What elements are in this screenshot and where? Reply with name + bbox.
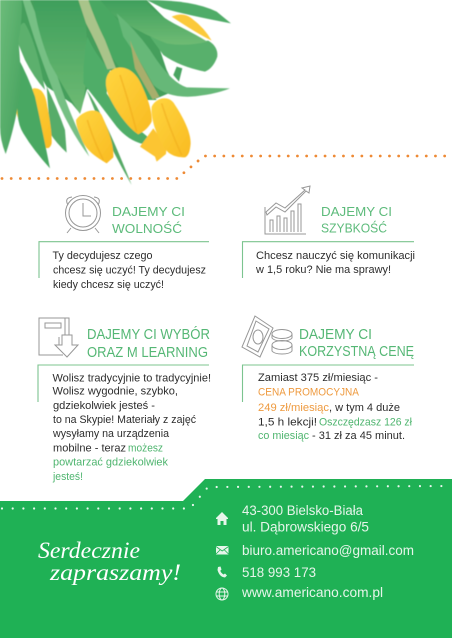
heading: szybkość bbox=[321, 204, 392, 236]
heading: cena: DAJEMY CI bbox=[299, 326, 372, 343]
greeting: zapraszamy! bbox=[49, 560, 181, 585]
text: wybór: wysyłamy na urządzenia bbox=[52, 428, 169, 440]
text: wybór: to na Skypie! Materiały z zajęć bbox=[53, 414, 197, 426]
text: cena bbox=[258, 372, 413, 442]
greeting bbox=[38, 538, 181, 585]
text: wolność: Ty decydujesz czego bbox=[52, 250, 153, 262]
rule: wolność bbox=[39, 242, 209, 278]
heading: wybór bbox=[87, 326, 210, 361]
icon: phone bbox=[218, 566, 227, 578]
white dotted divider bbox=[2, 486, 452, 508]
text: wybór bbox=[52, 372, 211, 483]
text: cena: 1,5 h lekcji! bbox=[258, 417, 317, 429]
text: wolność: chcesz się uczyć! Ty decydujesz bbox=[53, 264, 206, 276]
website: www.americano.com.pl bbox=[241, 585, 383, 600]
heading: wybór: ORAZ M LEARNING bbox=[87, 344, 208, 361]
text: wybór: możesz bbox=[128, 443, 163, 455]
text: wolność: kiedy chcesz się uczyć! bbox=[53, 279, 164, 291]
email: biuro.americano@gmail.com bbox=[242, 543, 414, 558]
text: cena: - 31 zł za 45 minut. bbox=[312, 430, 405, 442]
icon: envelope bbox=[216, 546, 228, 554]
panel: szybkość bbox=[242, 186, 415, 278]
heading: wybór: DAJEMY CI WYBÓR bbox=[87, 326, 210, 343]
panel: wybór bbox=[38, 318, 211, 483]
text: wybór: gdziekolwiek jesteś - bbox=[53, 400, 155, 412]
icon: rising chart bbox=[265, 186, 310, 234]
icon: document download bbox=[39, 318, 78, 357]
heading: wolność bbox=[112, 204, 185, 236]
heading: cena: KORZYSTNĄ CENĘ bbox=[299, 343, 414, 360]
greeting: Serdecznie bbox=[38, 538, 140, 563]
rule: szybkość bbox=[242, 242, 414, 278]
icon: banknote and coins bbox=[242, 316, 292, 357]
panel: wolność bbox=[39, 196, 209, 291]
text: wybór: Wolisz wygodnie, szybko, bbox=[52, 386, 178, 398]
footer band bbox=[0, 479, 452, 638]
orange dotted divider bbox=[2, 156, 452, 178]
icon: alarm clock bbox=[66, 196, 100, 233]
photo: yellow tulips bbox=[0, 0, 231, 185]
text: wybór: powtarzać gdziekolwiek bbox=[53, 457, 169, 469]
text: cena: 249 zł/miesiąc bbox=[258, 402, 330, 414]
phone: 518 993 173 bbox=[242, 565, 316, 580]
heading: wolność: DAJEMY CI bbox=[112, 204, 185, 219]
panel: cena bbox=[242, 316, 414, 442]
text: wolność bbox=[52, 250, 206, 291]
text: cena: , w tym 4 duże bbox=[329, 402, 400, 414]
address: ul. Dąbrowskiego 6/5 bbox=[242, 520, 369, 535]
icon: home bbox=[216, 512, 228, 525]
heading: wolność: WOLNOŚĆ bbox=[112, 221, 182, 236]
heading: szybkość: DAJEMY CI bbox=[321, 204, 392, 219]
text: szybkość: Chcesz nauczyć się komunikacji bbox=[256, 250, 415, 262]
icon: globe bbox=[216, 588, 228, 600]
text: wybór: mobilne - teraz bbox=[53, 443, 126, 455]
text: cena: co miesiąc bbox=[258, 430, 310, 442]
rule: wybór bbox=[38, 365, 209, 402]
text: szybkość bbox=[255, 250, 415, 276]
address: 43-300 Bielsko-Biała bbox=[242, 503, 363, 518]
heading: cena bbox=[299, 326, 414, 360]
text: cena: CENA PROMOCYJNA bbox=[258, 387, 360, 399]
address bbox=[242, 503, 369, 535]
text: wybór: Wolisz tradycyjnie to tradycyjnie! bbox=[52, 372, 211, 384]
text: wybór: jesteś! bbox=[52, 471, 83, 483]
rule: cena bbox=[242, 365, 414, 402]
heading: szybkość: SZYBKOŚĆ bbox=[321, 221, 387, 236]
text: szybkość: w 1,5 roku? Nie ma sprawy! bbox=[255, 264, 391, 276]
text: cena: Zamiast 375 zł/miesiąc - bbox=[258, 372, 378, 384]
text: cena: Oszczędzasz 126 zł bbox=[319, 417, 413, 429]
